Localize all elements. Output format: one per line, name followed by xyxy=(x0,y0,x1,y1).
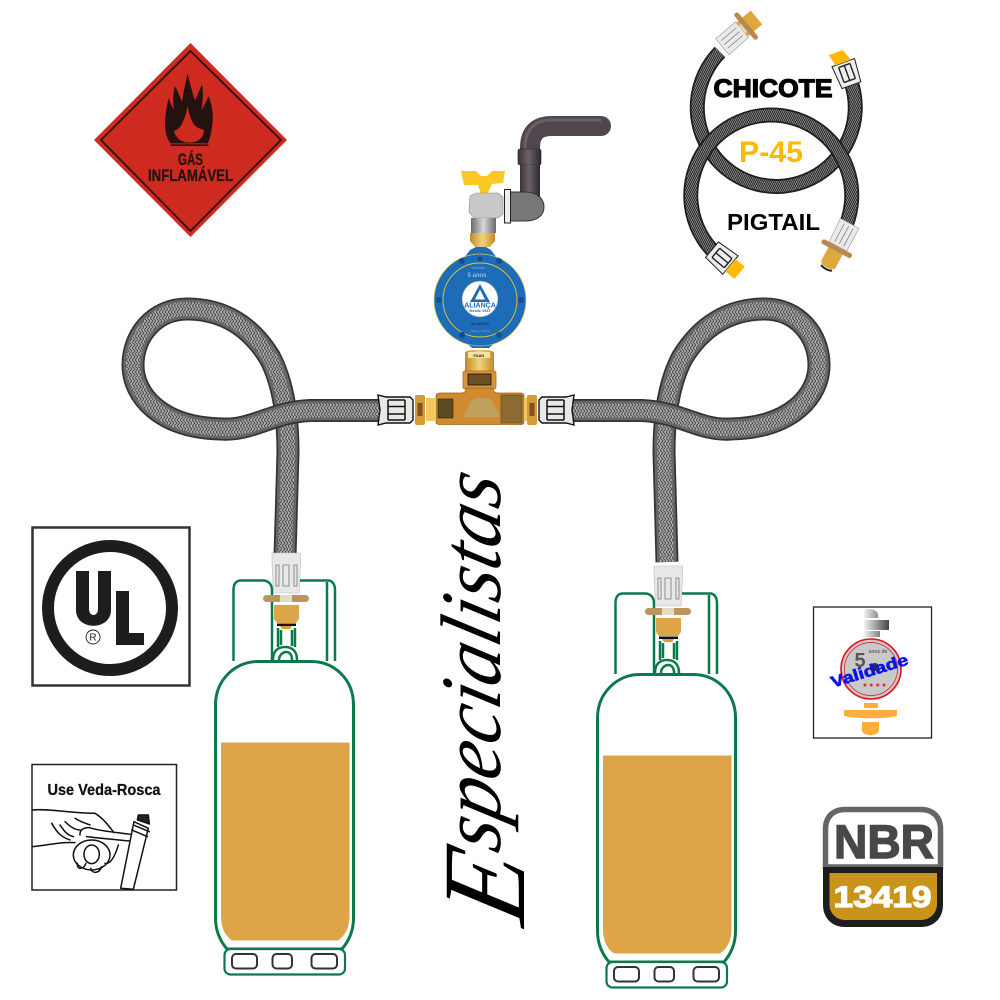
fitting: upper right orange tip xyxy=(828,47,863,89)
vertical script title: specialistas xyxy=(423,460,519,859)
regulator labels: Made in Brazil xyxy=(470,329,490,333)
chicote pigtail P-45 hoses xyxy=(691,4,865,282)
ball valve with yellow handle xyxy=(461,171,505,247)
valve handle xyxy=(461,171,505,195)
UL letters xyxy=(76,571,111,626)
NBR 13419 badge: 13419 xyxy=(834,881,932,914)
orange valve silhouette xyxy=(844,703,897,735)
fitting: upper left brass xyxy=(711,4,767,59)
regulator logo: Desde 1937 xyxy=(470,309,490,313)
regulator labels: ALIANÇA xyxy=(471,321,489,326)
icon: flame xyxy=(165,73,213,146)
gas level xyxy=(603,756,732,954)
red validity stamp: anos de xyxy=(869,649,888,655)
cylinder body xyxy=(598,674,736,962)
regulator labels xyxy=(467,266,490,333)
hazard diamond: gás inflamável xyxy=(94,43,287,237)
regulator labels: 5 anos xyxy=(467,273,487,279)
fitting: lower left orange tip xyxy=(704,240,747,282)
NBR 13419 badge xyxy=(823,810,943,927)
cylinder base xyxy=(606,962,727,988)
tee body xyxy=(436,388,524,424)
hazard label xyxy=(148,150,233,185)
cylinder handle xyxy=(616,594,717,674)
pipe elbow xyxy=(510,192,544,221)
valve silhouette top xyxy=(864,609,889,637)
red validity stamp xyxy=(841,639,901,699)
UL certification mark: R xyxy=(89,632,97,644)
vertical script title: E xyxy=(419,834,550,936)
use veda-rosca instruction xyxy=(32,764,176,890)
UL certification mark xyxy=(32,528,190,686)
left hose connector xyxy=(378,395,413,425)
regulator labels: Validade xyxy=(471,266,485,270)
hose: left braided loop xyxy=(133,309,380,556)
label: pigtail: PIGTAIL xyxy=(727,209,820,235)
right hose connector xyxy=(539,395,574,425)
regulator bolts xyxy=(436,256,524,338)
valve nut xyxy=(471,218,496,233)
vertical script title xyxy=(419,459,550,936)
gas level xyxy=(221,742,350,940)
brass nipple xyxy=(470,233,495,247)
five year validity badge xyxy=(814,607,932,738)
label: P-45: P-45 xyxy=(739,136,803,169)
cylinder left xyxy=(216,553,354,974)
NBR 13419 badge: NBR xyxy=(834,815,934,868)
brass tee manifold xyxy=(415,350,537,425)
regulator logo xyxy=(462,281,498,317)
hazard label: INFLAMÁVEL xyxy=(148,166,233,185)
gas outlet pipe xyxy=(504,120,601,223)
cylinder right xyxy=(598,566,736,988)
hose: chicote upper ring xyxy=(697,52,855,186)
label: chicote: CHICOTE xyxy=(714,75,832,103)
hose: pigtail lower ring xyxy=(691,115,852,250)
icon: hand wrapping tape xyxy=(33,810,149,889)
regulator logo: ALIANÇA xyxy=(464,302,496,310)
valve assembly xyxy=(645,566,691,642)
cylinder base xyxy=(224,949,345,974)
hose: right braided loop xyxy=(572,309,819,562)
cylinder handle xyxy=(234,580,335,661)
fitting: lower right brass xyxy=(811,216,865,277)
hazard label: GÁS xyxy=(178,150,203,169)
pipe flange xyxy=(504,190,510,223)
red validity stamp: 5 xyxy=(854,650,866,672)
left nut and threads xyxy=(415,395,436,425)
instruction title: Use Veda-Rosca xyxy=(48,782,161,799)
cylinder body xyxy=(216,662,354,949)
right nut and threads xyxy=(524,395,537,425)
red validity stamp: ★★★★ xyxy=(862,682,888,689)
valve body xyxy=(469,193,503,218)
valve assembly xyxy=(263,553,309,629)
validade label: Validade xyxy=(829,652,911,692)
upper brass connector: YDAN xyxy=(473,353,484,358)
gas regulator xyxy=(434,247,526,348)
